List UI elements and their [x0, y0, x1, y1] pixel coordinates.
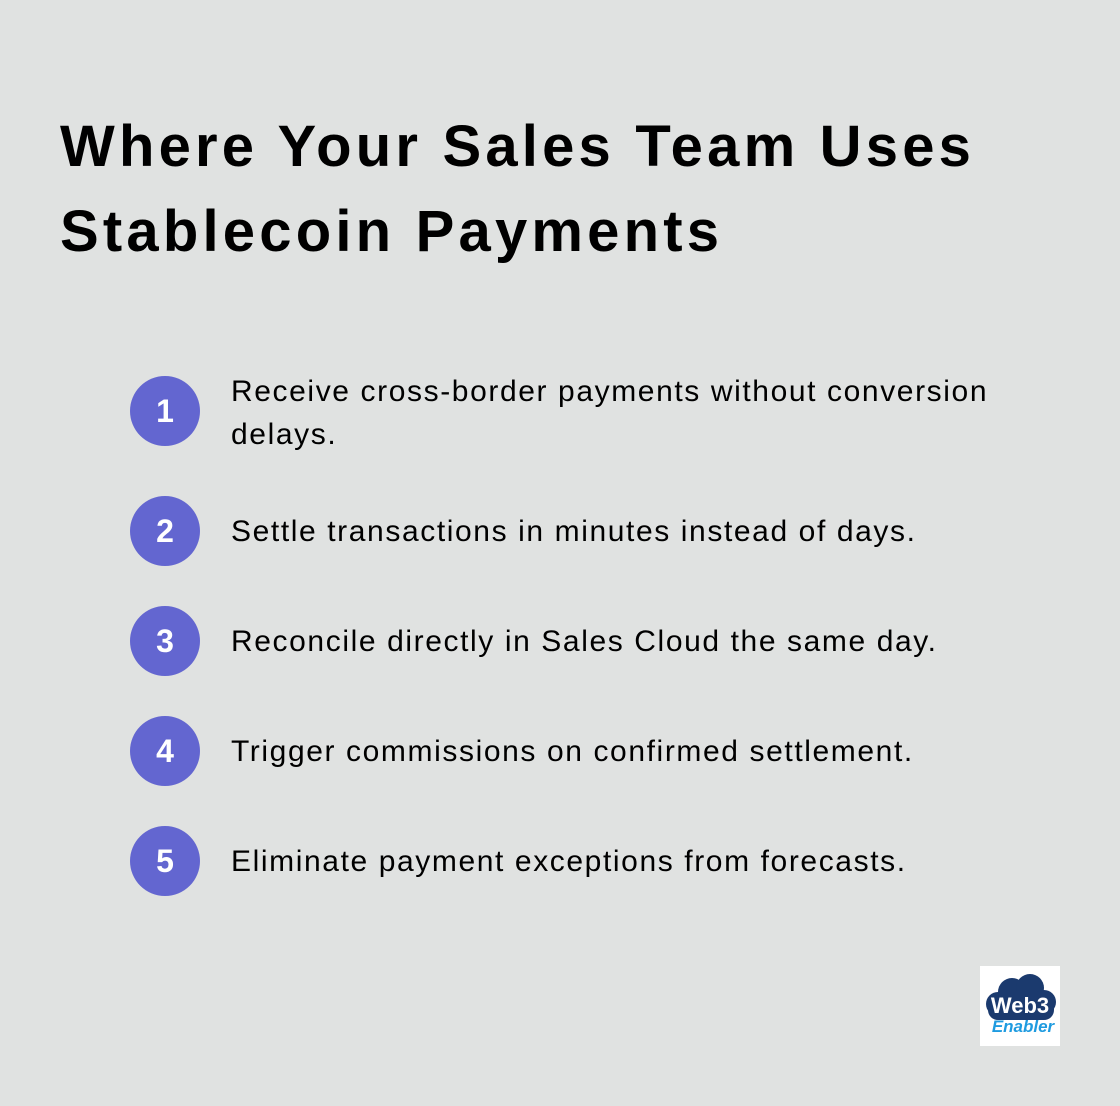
item 5: 5	[156, 843, 174, 879]
item 2: Settle transactions in minutes instead of days.	[231, 515, 917, 548]
title: Where Your Sales Team Uses	[60, 114, 975, 179]
item 1: Receive cross-border payments without conversion delays.	[231, 375, 988, 451]
title: Stablecoin Payments	[60, 199, 723, 264]
item 2	[130, 496, 917, 566]
item 5	[130, 826, 907, 896]
item 4: 4	[156, 733, 174, 769]
logo: Enabler	[992, 1017, 1056, 1036]
logo: Web3	[991, 993, 1049, 1018]
item 3	[130, 606, 938, 676]
item 1: 1	[156, 393, 174, 429]
title	[60, 114, 975, 264]
item 5: Eliminate payment exceptions from forecasts.	[231, 845, 907, 878]
item 4: Trigger commissions on confirmed settlement.	[231, 735, 914, 768]
item 3: 3	[156, 623, 174, 659]
item 2: 2	[156, 513, 174, 549]
item 3: Reconcile directly in Sales Cloud the same day.	[231, 625, 938, 658]
item 4	[130, 716, 914, 786]
logo	[980, 966, 1060, 1046]
